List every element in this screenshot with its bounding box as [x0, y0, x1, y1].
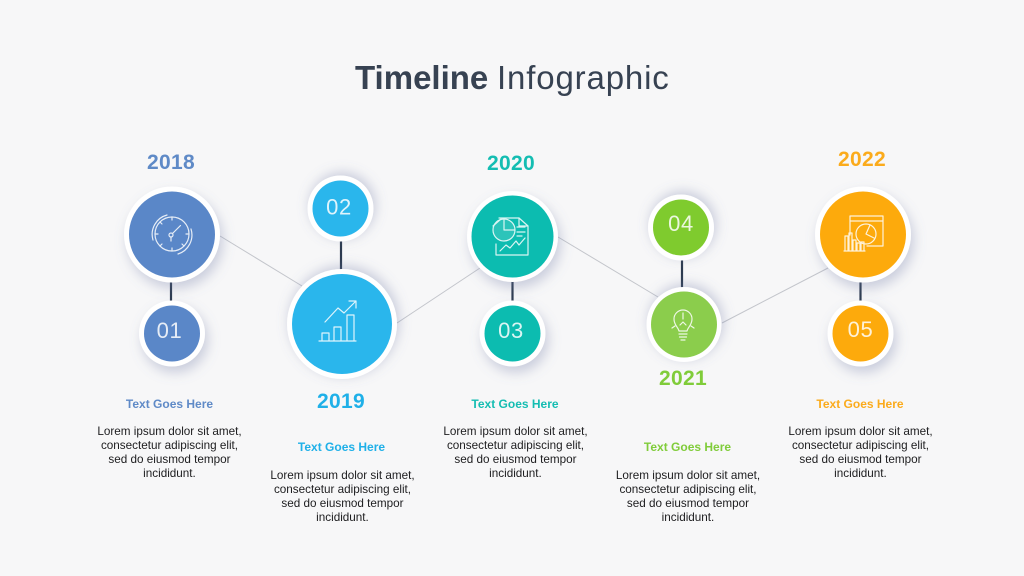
circle: 2018 — [124, 186, 220, 282]
description: Lorem ipsum dolor sit amet, — [788, 425, 933, 438]
step number 02 — [308, 176, 374, 242]
description: consectetur adipiscing elit, — [447, 439, 584, 452]
description: sed do eiusmod tempor — [627, 497, 749, 510]
heading: text goes here: Text Goes Here — [298, 440, 385, 454]
description: sed do eiusmod tempor — [799, 453, 922, 466]
description: incididunt. — [662, 511, 714, 524]
year 2019: 2019 — [317, 390, 365, 413]
description: incididunt. — [316, 511, 369, 524]
description: sed do eiusmod tempor — [108, 453, 231, 466]
step number 01 — [139, 300, 205, 366]
description: Lorem ipsum dolor sit amet, — [97, 425, 242, 438]
year 2022: 2022 — [838, 148, 886, 171]
step number 03 — [480, 300, 546, 366]
step number 05 — [828, 300, 894, 366]
panel: 2019 milestone — [270, 176, 415, 524]
icon: growth chart — [319, 301, 356, 341]
step number 02: 02 — [326, 194, 352, 220]
description: incididunt. — [834, 467, 887, 480]
icon: report document — [493, 218, 528, 255]
year 2018: 2018 — [147, 151, 195, 174]
description: Lorem ipsum dolor sit amet, — [616, 469, 760, 482]
description: consectetur adipiscing elit, — [619, 483, 757, 496]
step number 01: 01 — [157, 318, 182, 343]
timeline connector lines — [171, 236, 860, 323]
circle: 2022 — [815, 186, 911, 282]
heading: text goes here: Text Goes Here — [644, 440, 731, 454]
heading: text goes here: Text Goes Here — [816, 397, 904, 411]
panel: 2021 milestone — [616, 194, 760, 524]
panel: 2020 milestone — [443, 152, 588, 480]
description: consectetur adipiscing elit, — [792, 439, 929, 452]
heading: text goes here: Text Goes Here — [471, 397, 559, 411]
step number 05: 05 — [848, 317, 873, 342]
panel: 2018 milestone — [97, 151, 242, 480]
circle: 2021 — [646, 287, 722, 362]
step number 03: 03 — [498, 318, 524, 343]
circle: 2019 — [287, 269, 397, 379]
circle: 2020 — [467, 191, 558, 282]
year 2021: 2021 — [659, 367, 707, 390]
description: sed do eiusmod tempor — [281, 497, 404, 510]
panel: 2022 milestone — [788, 148, 933, 480]
description: consectetur adipiscing elit, — [101, 439, 238, 452]
description: sed do eiusmod tempor — [454, 453, 577, 466]
icon: stopwatch dial — [152, 215, 192, 254]
icon: light bulb — [672, 310, 694, 340]
title: Timeline — [355, 59, 488, 96]
year 2020: 2020 — [487, 152, 535, 175]
description: incididunt. — [489, 467, 542, 480]
step number 04 — [648, 194, 714, 260]
heading: text goes here: Text Goes Here — [126, 397, 213, 411]
icon: presentation screen — [844, 216, 883, 251]
title: Infographic — [497, 59, 670, 96]
step number 04: 04 — [668, 211, 694, 236]
description: incididunt. — [143, 467, 196, 480]
description: Lorem ipsum dolor sit amet, — [443, 425, 588, 438]
description: consectetur adipiscing elit, — [274, 483, 411, 496]
description: Lorem ipsum dolor sit amet, — [270, 469, 415, 482]
